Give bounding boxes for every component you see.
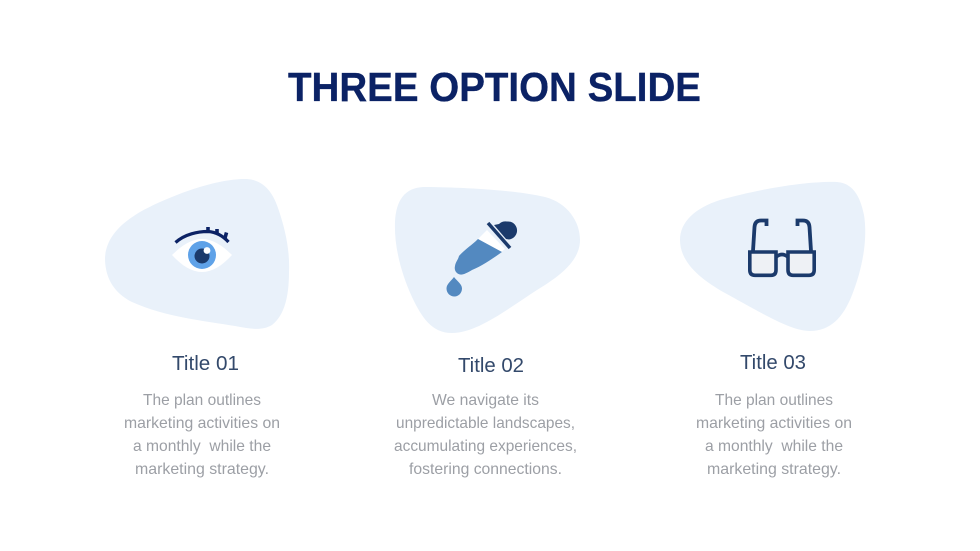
text block: option 1 description: The plan outlines <box>143 392 261 409</box>
text block: option 3 description: The plan outlines <box>715 392 833 409</box>
text block: option 1 description <box>124 392 280 478</box>
heading: Title 02: Title 02 <box>458 355 524 377</box>
icon: dropper <box>446 221 517 296</box>
text block: option 2 description: fostering connections. <box>409 461 562 478</box>
text block: option 1 description: a monthly while the <box>133 438 271 455</box>
panel: option 2 <box>394 187 580 478</box>
text block: option 3 description: a monthly while the <box>705 438 843 455</box>
heading: Title 01: Title 01 <box>172 353 239 375</box>
blob background 1 <box>105 179 289 329</box>
text block: option 3 description: marketing strategy. <box>707 461 841 478</box>
text block: option 3 description: marketing activities on <box>696 415 852 432</box>
text block: option 1 description: marketing activities on <box>124 415 280 432</box>
icon: eye <box>172 227 232 272</box>
panel: option 1 <box>105 179 289 478</box>
text block: option 1 description: marketing strategy. <box>135 461 269 478</box>
text block: option 2 description: accumulating experiences, <box>394 438 577 455</box>
panel: option 3 <box>680 182 865 478</box>
blob background 2 <box>395 187 580 333</box>
text block: option 2 description: unpredictable landscapes, <box>396 415 575 432</box>
title: THREE OPTION SLIDE <box>288 64 701 110</box>
blob background 3 <box>680 182 865 331</box>
icon: glasses <box>750 220 814 275</box>
text block: option 3 description <box>696 392 852 478</box>
text block: option 2 description <box>394 392 577 478</box>
heading: Title 03: Title 03 <box>740 352 806 374</box>
text block: option 2 description: We navigate its <box>432 392 539 409</box>
